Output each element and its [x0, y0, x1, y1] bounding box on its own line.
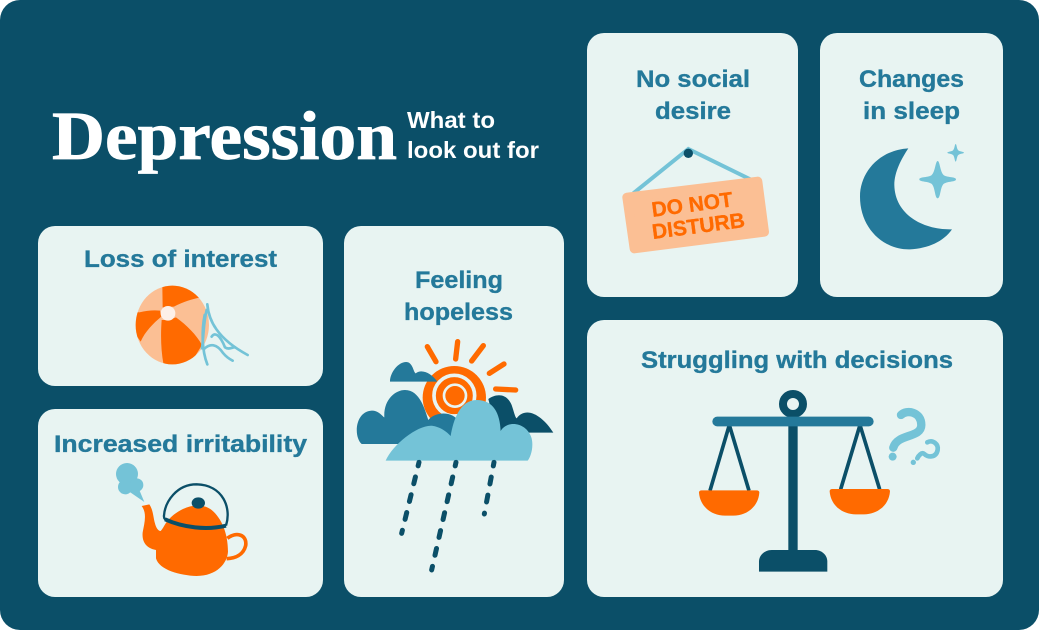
subtitle: look out for	[407, 137, 539, 163]
panel: loss of interest	[38, 226, 323, 386]
icon: balance scale with question marks	[699, 394, 938, 572]
heading: changes in sleep	[859, 66, 964, 125]
icon: do not disturb sign: DISTURB	[651, 209, 746, 244]
heading: feeling hopeless: Feeling	[415, 267, 503, 294]
panel: no social desire	[587, 33, 798, 297]
panel: increased irritability	[38, 409, 323, 597]
icon: steaming kettle	[116, 463, 246, 576]
heading: increased irritability: Increased irritability	[54, 431, 308, 458]
panel: feeling hopeless	[344, 226, 564, 597]
heading: loss of interest: Loss of interest	[84, 246, 277, 273]
icon: moon and stars	[860, 144, 964, 249]
title: Depression	[52, 98, 397, 174]
panel: struggling with decisions	[587, 320, 1003, 597]
heading: changes in sleep: in sleep	[863, 98, 960, 125]
icon: sun behind rain clouds	[357, 342, 553, 570]
icon: do not disturb sign: DO NOT	[650, 188, 734, 222]
heading: no social desire: desire	[655, 98, 731, 125]
panel: changes in sleep	[820, 33, 1003, 297]
heading: struggling with decisions: Struggling with decisions	[641, 347, 953, 374]
subtitle: What to	[407, 107, 495, 133]
heading: no social desire: No social	[636, 66, 750, 93]
heading: feeling hopeless: hopeless	[404, 299, 513, 326]
icon: beach ball with cobweb	[136, 286, 249, 366]
icon: do not disturb sign	[627, 149, 764, 249]
heading: feeling hopeless	[404, 267, 513, 326]
heading: changes in sleep: Changes	[859, 66, 964, 93]
subtitle	[407, 107, 539, 163]
heading: no social desire	[636, 66, 750, 125]
